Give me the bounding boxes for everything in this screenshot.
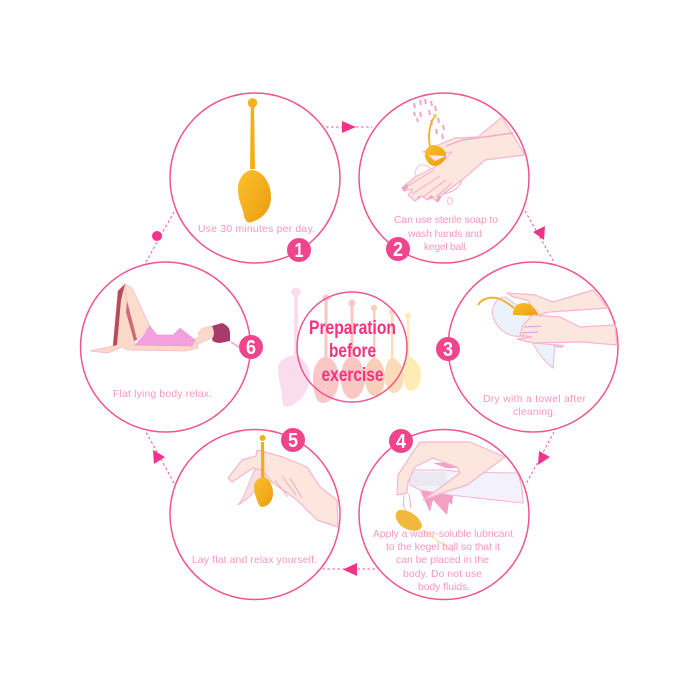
- heading: preparation before exercise: [309, 318, 396, 386]
- panel: step 4: [359, 429, 529, 600]
- badge: 2: 2: [393, 239, 403, 261]
- text: step 4 caption: Apply a water-soluble lubricant: [373, 529, 513, 540]
- panel: centre: [278, 288, 421, 407]
- text: step 1 caption: Use 30 minutes per day.: [198, 224, 315, 235]
- panel: step 3: [436, 262, 618, 432]
- text: step 2 caption line 2: wash hands and: [407, 229, 482, 240]
- icon: lubricant bottle and hand: [396, 442, 523, 552]
- text: step 3 caption line 2: cleaning.: [513, 407, 556, 418]
- text: step 2 caption line 3: kegel ball.: [424, 242, 468, 253]
- text: step 2 caption: Can use sterile soap to: [394, 215, 498, 226]
- badge: 5: [281, 428, 305, 452]
- icon: woman lying on back: [90, 284, 239, 353]
- text: step 4 caption line 4: body. Do not use: [403, 569, 482, 580]
- icon: washing hands with ball: [402, 114, 525, 204]
- badge: 4: 4: [396, 431, 407, 453]
- arrow: step 2 to step 3: [525, 211, 554, 262]
- text: step 4 caption line 2: to the kegel ball so that it: [386, 542, 500, 553]
- panel: step 5: [170, 428, 340, 600]
- text: step 4 caption line 3: can be placed in the: [396, 555, 489, 566]
- arrow: step 1 to step 2: [326, 121, 372, 133]
- panel: step 1: [170, 93, 340, 263]
- heading: preparation before exercise: Preparation: [309, 318, 396, 339]
- icon: water drops: [414, 99, 444, 139]
- heading: preparation before exercise: exercise: [322, 365, 384, 386]
- text: step 6 caption: Flat lying body relax.: [113, 389, 212, 400]
- text: step 3 caption: Dry with a towel after: [483, 394, 587, 405]
- text: step 5 caption: Lay flat and relax yourself.: [192, 555, 317, 566]
- text: step 4 caption line 5: body fluids.: [418, 582, 470, 593]
- badge: 2: [386, 237, 410, 261]
- badge: 3: 3: [443, 339, 453, 361]
- badge: 6: [239, 335, 263, 359]
- arrow: step 4 to step 5: [322, 563, 375, 576]
- badge: 3: [436, 337, 460, 361]
- badge: 6: 6: [246, 337, 256, 359]
- panel: step 2: [359, 93, 529, 263]
- heading: preparation before exercise: before: [329, 341, 376, 362]
- icon: drying with towel: [478, 290, 617, 368]
- icon: hand holding ball: [228, 435, 338, 527]
- icon: row of faded kegel balls: [278, 288, 421, 407]
- badge: 1: 1: [294, 240, 304, 262]
- badge: 1: [287, 238, 311, 262]
- badge: 4: [389, 429, 413, 453]
- arrow: step 3 to step 4: [526, 432, 554, 484]
- arrow: step 6 to step 1: [146, 212, 174, 262]
- arrow: step 5 to step 6: [146, 432, 174, 483]
- badge: 5: 5: [288, 430, 298, 452]
- panel: step 6: [80, 262, 263, 432]
- icon: kegel ball: [238, 98, 271, 223]
